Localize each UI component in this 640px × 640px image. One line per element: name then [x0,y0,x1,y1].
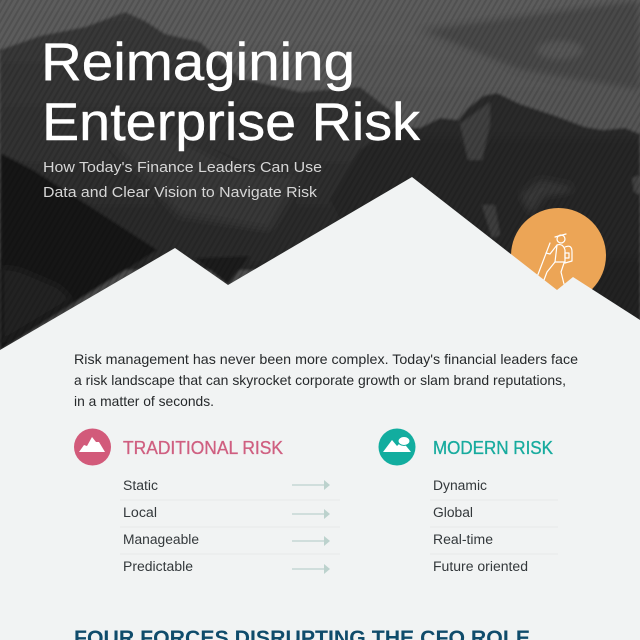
title [41,33,421,152]
intro text block: a risk landscape that can skyrocket corporate growth or slam brand reputations, [74,372,566,388]
list: modern risk items: Real-time [433,532,493,547]
intro text block: in a matter of seconds. [74,393,214,409]
list: modern risk items: Dynamic [433,478,487,493]
list: modern risk items: Global [433,505,473,520]
icon: mountain and cloud in teal circle [378,428,416,466]
subtitle: Data and Clear Vision to Navigate Risk [43,184,318,201]
list: traditional risk items: Predictable [123,559,193,574]
subtitle: How Today's Finance Leaders Can Use [43,159,322,176]
list: modern risk items [433,478,528,574]
header photo: mountains [0,0,640,355]
panel: modern risk [378,428,553,574]
white mountain silhouette [0,177,640,640]
icon: hiker in orange circle [511,208,606,303]
heading: modern risk: MODERN RISK [433,438,553,458]
arrows: traditional to modern [292,480,330,574]
title: Reimagining [41,33,355,92]
heading: traditional risk: TRADITIONAL RISK [123,438,283,458]
list: traditional risk items [123,478,199,574]
list: modern risk items: Future oriented [433,559,528,574]
title: Enterprise Risk [42,93,421,152]
intro text block [74,351,578,409]
icon: snowy mountain in pink circle [74,428,111,466]
list: traditional risk items: Local [123,505,157,520]
list: traditional risk items: Manageable [123,532,199,547]
panel: traditional risk [74,428,283,574]
intro text block: Risk management has never been more complex. Today's financial leaders face [74,351,578,367]
list: traditional risk items: Static [123,478,158,493]
subtitle [43,159,322,201]
